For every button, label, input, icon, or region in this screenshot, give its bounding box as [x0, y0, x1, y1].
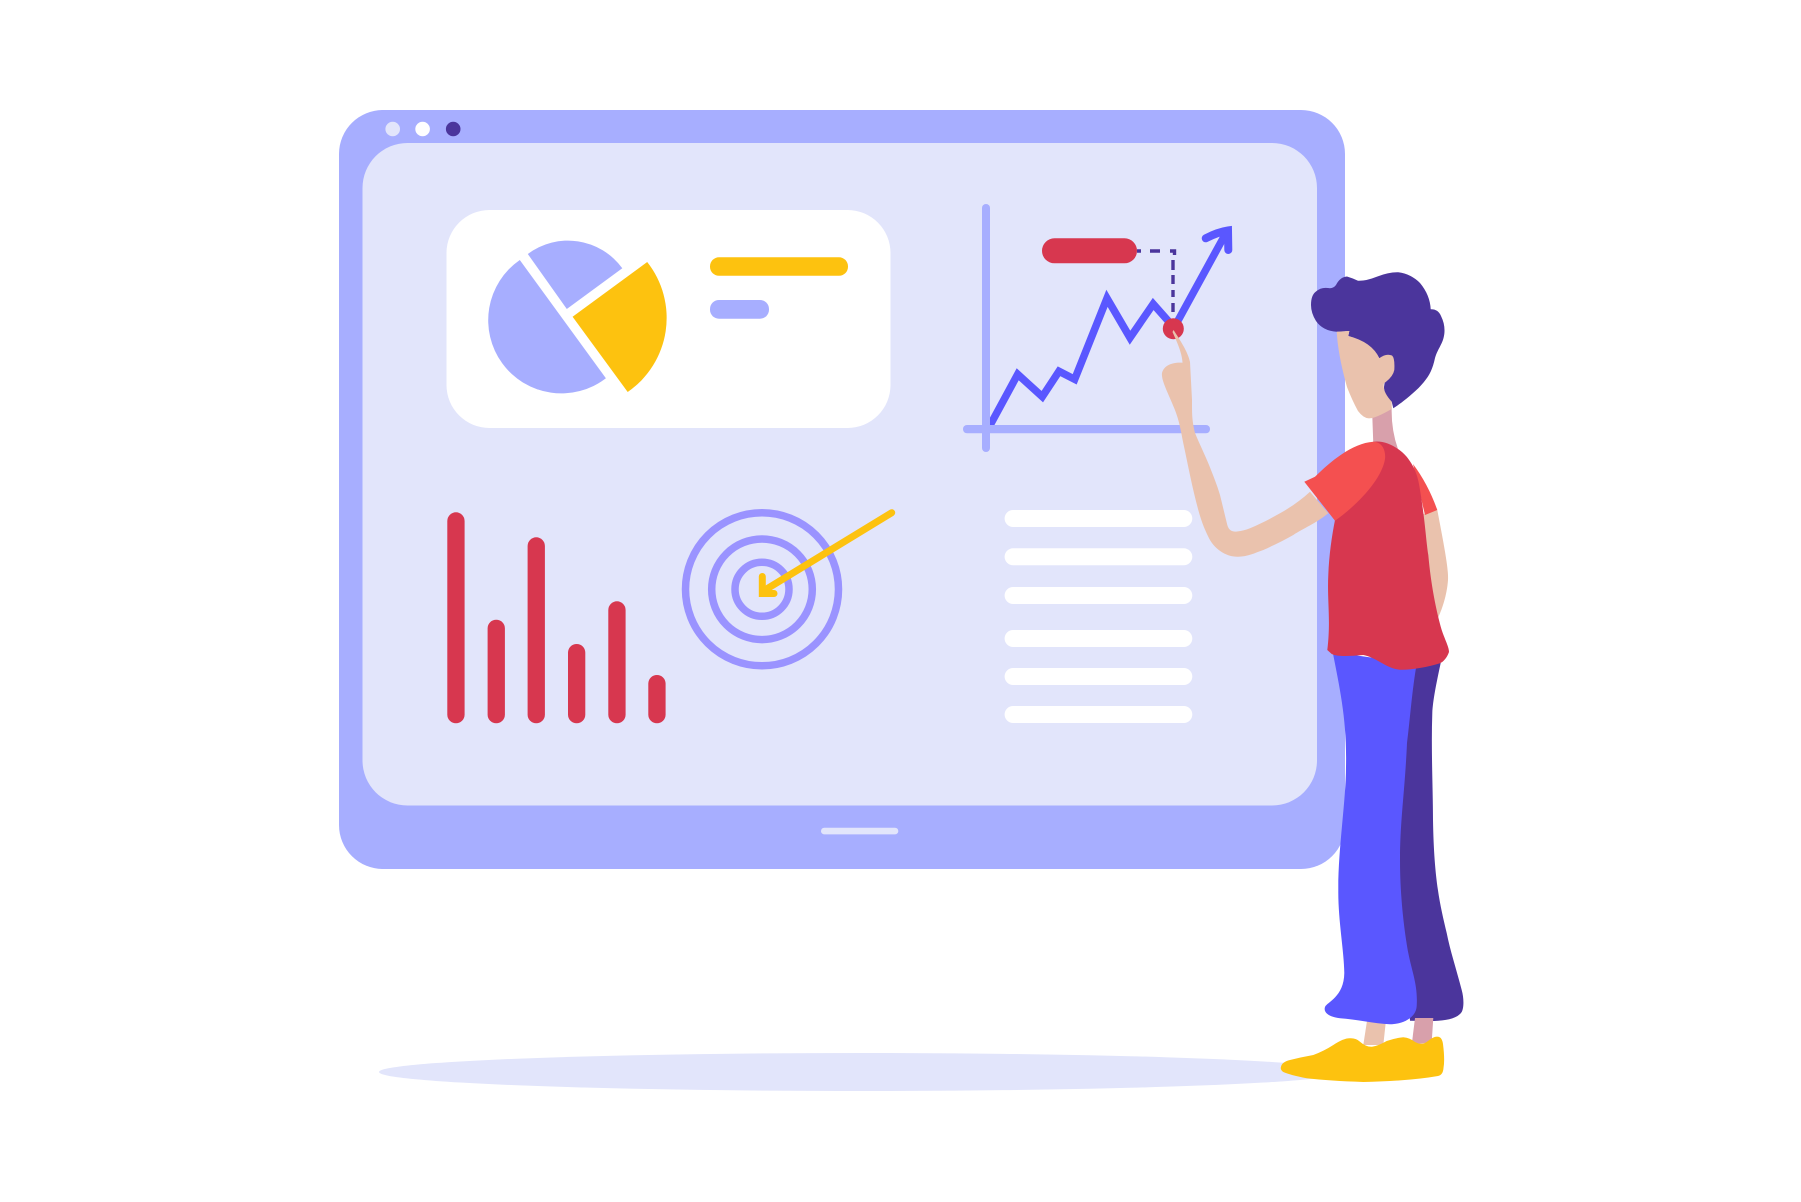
target rings	[686, 513, 838, 666]
trend arrow head	[1206, 230, 1228, 250]
back leg	[1400, 660, 1463, 1021]
browser window	[339, 110, 1345, 869]
legend bars	[710, 257, 848, 319]
face	[1337, 331, 1394, 418]
line chart	[963, 204, 1228, 452]
window control dots	[385, 122, 461, 136]
back arm	[1420, 510, 1448, 620]
back sleeve	[1413, 464, 1437, 515]
window frame	[339, 110, 1345, 869]
target arrow	[762, 513, 892, 594]
card background	[446, 210, 890, 428]
person	[1162, 272, 1463, 1082]
trend line	[988, 233, 1226, 430]
screen	[362, 143, 1317, 806]
red callout pill	[1042, 238, 1137, 263]
ground shadow	[379, 1053, 1345, 1091]
dashed callout connector	[1137, 251, 1174, 312]
shoes	[1281, 1037, 1444, 1082]
panel: pie chart card	[446, 210, 890, 428]
front arm and pointing hand	[1162, 330, 1328, 557]
front sleeve	[1304, 442, 1385, 521]
front leg	[1325, 652, 1417, 1024]
bar chart	[447, 512, 666, 723]
highlighted data point	[1163, 318, 1184, 339]
chart axes	[963, 204, 1210, 452]
ankles	[1363, 1018, 1433, 1045]
hair	[1311, 272, 1445, 408]
pie chart	[488, 241, 667, 393]
shirt	[1327, 441, 1449, 670]
neck	[1372, 407, 1398, 450]
target icon	[686, 513, 892, 666]
home bar	[821, 828, 898, 834]
text placeholder lines	[1005, 510, 1192, 723]
